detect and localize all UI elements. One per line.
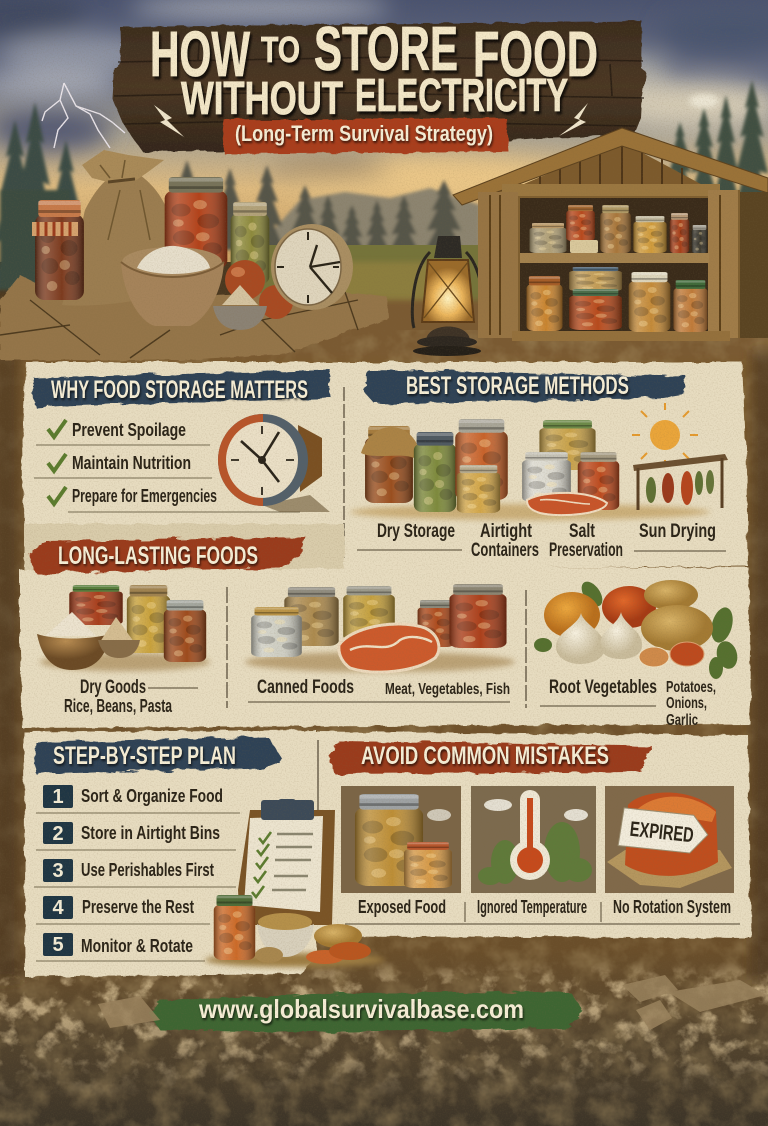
step 4: 4 (52, 897, 64, 919)
card: ignored temperature (471, 786, 596, 917)
banner: step-by-step plan (34, 737, 283, 774)
jar: airtight yellow (457, 465, 500, 513)
icon: clipboard with food (205, 799, 385, 967)
checklist: Prevent Spoilage (72, 420, 186, 440)
label: root vegetables: Garlic (666, 712, 698, 729)
label: canned foods: Canned Foods (257, 677, 354, 698)
shed posts (478, 192, 518, 338)
title line 1: STORE (314, 15, 458, 84)
title line 2: WITHOUT (181, 72, 343, 124)
title line 1: TO (261, 29, 300, 70)
jar: tan (284, 587, 339, 646)
step 5 (43, 933, 193, 956)
icon: sun (632, 403, 698, 467)
clipboard (238, 799, 335, 925)
background: ground (0, 320, 768, 1126)
checklist (34, 420, 300, 512)
subtitle banner: (Long-Term Survival Strategy) (235, 121, 493, 146)
subtitle banner (222, 118, 509, 154)
card: ignored temperature: Ignored Temperature (477, 897, 587, 917)
background: storm sky (0, 0, 768, 262)
icon: clock (218, 414, 330, 512)
panel: long-lasting foods (20, 537, 751, 729)
jar: chunks (164, 600, 206, 662)
sandy ground patches (0, 960, 768, 1100)
red onion (602, 586, 656, 628)
icon: bolt right (559, 103, 588, 136)
label: dry goods (64, 677, 198, 716)
jar: beans (127, 585, 170, 653)
food pile (205, 953, 385, 967)
step 1: Sort & Organize Food (81, 786, 223, 806)
tag: expired: EXPIRED (629, 818, 695, 847)
title board (112, 15, 646, 154)
title line 2: ELECTRICITY (355, 69, 568, 121)
hero: stone platform (0, 275, 388, 360)
label: root vegetables: Potatoes, (666, 679, 716, 696)
jar: salt red (578, 452, 619, 510)
parchment (24, 730, 316, 977)
hero: apples (225, 260, 293, 319)
label: canned foods: Meat, Vegetables, Fish (385, 681, 510, 698)
hero: oil lantern (412, 236, 484, 356)
hero: green jar (231, 202, 269, 284)
jar: large red (449, 584, 507, 648)
background: field (240, 245, 490, 315)
card: exposed food (341, 786, 461, 917)
banner: why food storage matters (33, 370, 332, 408)
drying rack (633, 454, 728, 510)
stones bottom right (98, 975, 766, 1030)
step 4 (43, 896, 194, 919)
group: canned foods (245, 584, 515, 702)
title line 2 (181, 69, 568, 124)
jar (214, 895, 255, 960)
banner: step-by-step plan: STEP-BY-STEP PLAN (53, 742, 236, 770)
banner: long-lasting foods: LONG-LASTING FOODS (58, 542, 258, 570)
label: dry goods: Rice, Beans, Pasta (64, 696, 173, 716)
step 1 (43, 785, 223, 808)
salted meat (527, 493, 607, 515)
garlic left (556, 613, 605, 664)
bowl of beans (257, 913, 314, 957)
step 3: Use Perishables First (81, 860, 214, 880)
background: distant mountains and tree line (170, 160, 480, 250)
step 1: 1 (52, 786, 64, 808)
step 5: 5 (52, 934, 64, 956)
method illustrations (350, 403, 728, 520)
jar: airtight green (414, 432, 456, 512)
label: root vegetables (540, 677, 716, 729)
title line 1: FOOD (473, 18, 598, 90)
hero: wooden storage shed (453, 128, 768, 341)
hero: red jar (165, 177, 227, 269)
label: dry goods: Dry Goods (80, 677, 146, 698)
jar: red with green lid (69, 585, 123, 625)
jar: small red (418, 600, 454, 647)
banner: avoid common mistakes: AVOID COMMON MISTAKES (361, 742, 609, 770)
bowl of rice (37, 612, 110, 670)
parchment (316, 732, 751, 938)
step 3 (43, 859, 214, 882)
method labels: Airtight (480, 521, 533, 542)
jar: chickpeas (343, 586, 395, 641)
step 2: 2 (52, 823, 64, 845)
group: root vegetables (534, 578, 740, 729)
jar: salt green lid (539, 420, 596, 470)
background: forest right (668, 80, 768, 210)
background: forest left (0, 102, 86, 292)
step 3: 3 (52, 860, 64, 882)
shed interior (520, 198, 709, 333)
banner: best storage methods (364, 370, 686, 404)
banner: why food storage matters: WHY FOOD STORAGE MATTERS (51, 376, 308, 404)
banner: avoid common mistakes (328, 741, 652, 774)
checklist: Prepare for Emergencies (72, 486, 217, 506)
card: no rotation system (605, 786, 734, 917)
bottom shelf jars (527, 267, 708, 332)
url banner: www.globalsurvivalbase.com (198, 994, 524, 1024)
parchment (340, 362, 748, 570)
garlic right (600, 612, 642, 659)
card: exposed food: Exposed Food (358, 897, 446, 917)
url banner (150, 992, 583, 1032)
parchment (20, 567, 751, 728)
lightning strike (42, 83, 125, 148)
label: root vegetables: Onions, (666, 695, 707, 712)
onion (544, 592, 600, 638)
small bowl (98, 617, 140, 658)
method labels: Salt (569, 521, 595, 542)
background: clouds (0, 0, 768, 198)
method labels: Dry Storage (377, 521, 455, 542)
thermometer (510, 790, 550, 880)
method labels: Sun Drying (639, 521, 716, 542)
strip behind long-lasting banner (24, 524, 344, 572)
step 5: Monitor & Rotate (81, 936, 193, 956)
jar: airtight red (455, 419, 508, 500)
jar: salt white (522, 452, 571, 502)
method labels: Preservation (549, 540, 623, 561)
panel: why food storage matters (22, 362, 350, 528)
hero: striped-lid jar (32, 200, 84, 300)
step 2 (43, 822, 220, 845)
step 2: Store in Airtight Bins (81, 823, 220, 843)
leaves (534, 578, 740, 679)
top shelf jars (530, 205, 707, 253)
potato top (644, 580, 698, 610)
panel: step-by-step plan (24, 730, 316, 977)
step 4: Preserve the Rest (82, 897, 194, 917)
title line 1 (150, 15, 598, 90)
method labels: Containers (471, 540, 539, 561)
small onion halves (639, 647, 669, 667)
group: dry goods (37, 585, 210, 716)
checklist: Maintain Nutrition (72, 453, 191, 473)
parchment (22, 362, 350, 528)
potato large (641, 605, 713, 651)
label: canned foods (248, 677, 510, 702)
jar: dry storage (361, 426, 417, 503)
hero: burlap sack (62, 150, 179, 306)
jar: white (251, 607, 302, 657)
panel: best storage methods (340, 362, 748, 570)
shed wall (478, 190, 740, 338)
banner: long-lasting foods (28, 537, 306, 573)
hero: small bowl (213, 285, 267, 330)
label: root vegetables: Root Vegetables (549, 677, 657, 698)
banner: best storage methods: BEST STORAGE METHODS (406, 372, 629, 400)
icon: bolt left (154, 105, 184, 137)
side margins (0, 350, 768, 980)
panel: avoid common mistakes (316, 732, 751, 938)
shed roof (453, 128, 768, 205)
shed shelf (520, 253, 709, 263)
title line 1: HOW (150, 18, 250, 90)
hero: grain bowl (121, 246, 224, 326)
hero: wall clock (271, 224, 353, 310)
potato (314, 924, 362, 948)
cut of meat (339, 624, 439, 672)
wooden planks (112, 21, 646, 152)
sweet potatoes (255, 942, 371, 964)
method labels (357, 521, 726, 561)
